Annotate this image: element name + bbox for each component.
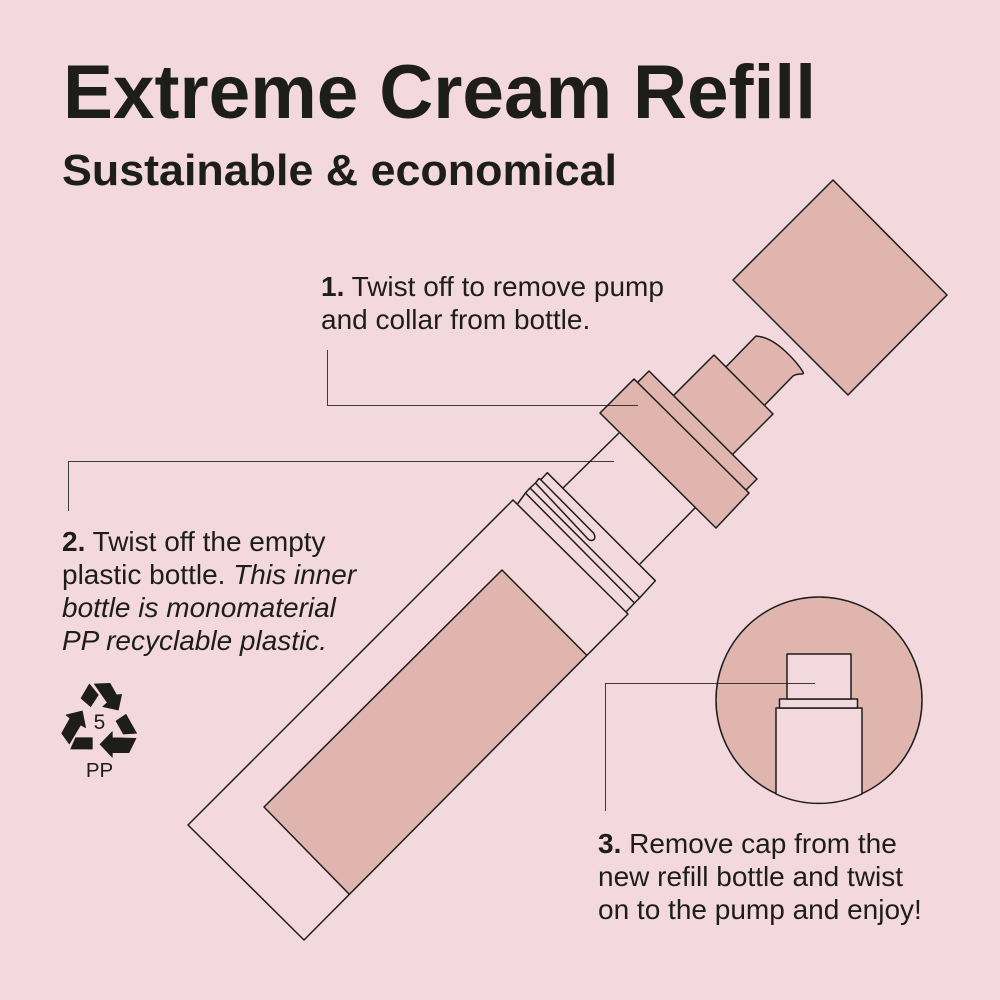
- step 2 text: plastic bottle. This inner: [62, 559, 356, 590]
- leader line 1: [328, 350, 638, 406]
- collar flange: [632, 371, 757, 496]
- step 2 text: bottle is monomaterial: [62, 592, 337, 623]
- step 3 text: on to the pump and enjoy!: [598, 894, 922, 925]
- pump cap: [733, 180, 947, 395]
- leader line 3: [606, 684, 815, 811]
- step 2 text: PP recyclable plastic.: [62, 625, 327, 656]
- refill bottle cap: [787, 654, 851, 699]
- step 3 text: new refill bottle and twist: [598, 861, 903, 892]
- pump block: [665, 355, 773, 464]
- threaded bottle neck: [518, 473, 655, 612]
- subtitle: Sustainable & economical: [62, 147, 617, 195]
- icon: PP recycling symbol: 5: [94, 711, 105, 734]
- leader line 2: [68, 462, 614, 511]
- refill bottle flange: [780, 699, 858, 708]
- icon: PP recycling symbol: [62, 683, 137, 782]
- illustration: pump bottle: [188, 336, 803, 940]
- circle background: [716, 597, 922, 803]
- step 2 text: 2. Twist off the empty: [62, 526, 326, 557]
- bottle body: [188, 500, 628, 940]
- collar: [600, 379, 749, 528]
- inner tube: [563, 433, 695, 564]
- title: Extreme Cream Refill: [63, 50, 816, 135]
- icon: PP recycling symbol: PP: [86, 759, 113, 782]
- detail circle: refill bottle: [716, 597, 922, 803]
- step 1 text: 1. Twist off to remove pump: [321, 271, 664, 302]
- nozzle: [720, 336, 803, 415]
- refill bottle body: [776, 708, 862, 803]
- step 3 text: 3. Remove cap from the: [598, 828, 897, 859]
- product label: [264, 570, 587, 894]
- step 1 text: and collar from bottle.: [321, 304, 590, 335]
